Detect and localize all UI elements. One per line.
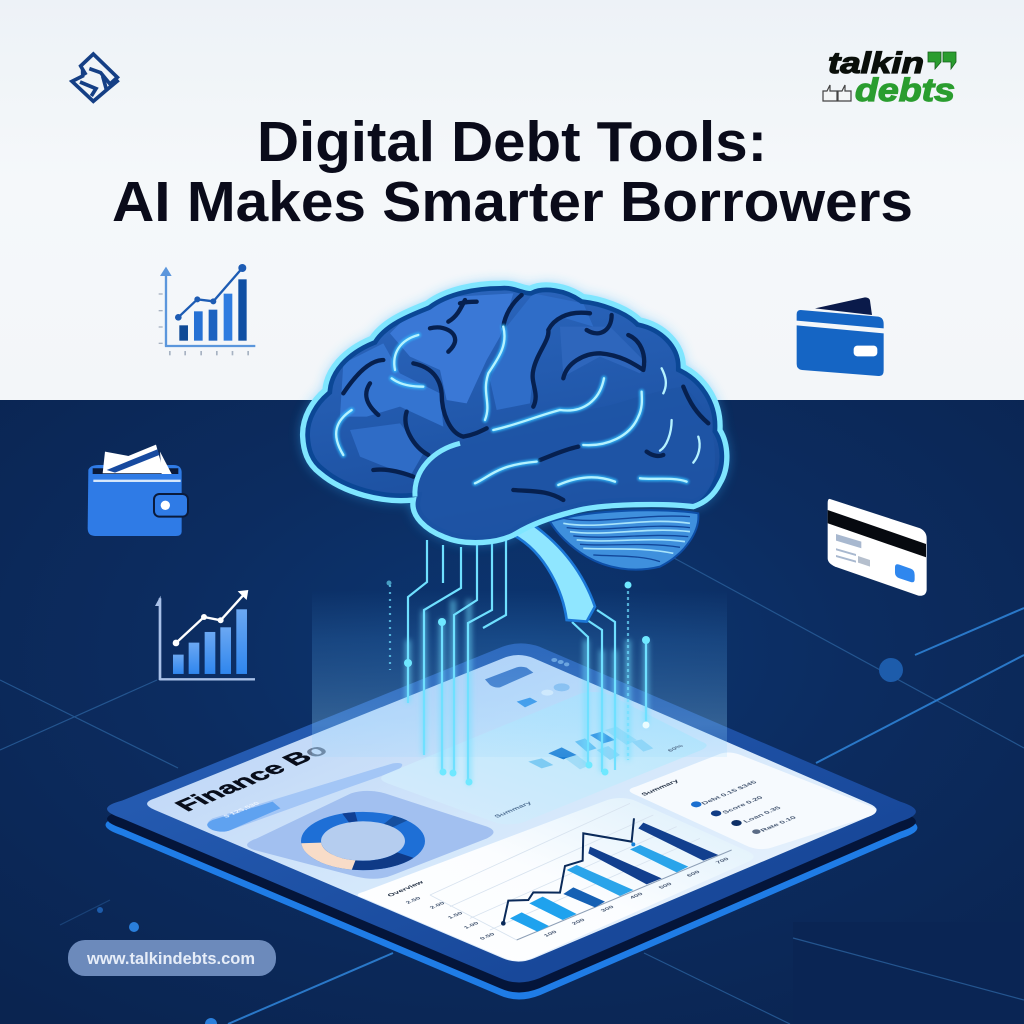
cerebellum (550, 510, 698, 570)
brain body (303, 283, 727, 543)
dashboard small labels: 100 (543, 930, 559, 938)
dashboard small labels: Debt 0.15 $345 (699, 779, 759, 806)
logo word: talkin: talkin (828, 47, 924, 80)
brain outer glow (303, 283, 727, 543)
dashboard small labels: 400 (629, 892, 645, 900)
chart card (358, 798, 754, 961)
dashboard small labels: 200 (571, 918, 587, 926)
chart baseline (517, 850, 732, 940)
icon: outlined quote bubbles (823, 85, 851, 101)
chart bars (510, 823, 718, 932)
dashboard small labels: Summary (492, 800, 533, 819)
logo word: debts: debts (855, 72, 955, 108)
dashboard small labels: 600 (686, 870, 702, 878)
dashboard small labels: Rate 0.10 (758, 815, 798, 833)
chart grid (430, 803, 700, 940)
website url: www.talkindebts.com (86, 950, 255, 968)
brain dark folds (343, 295, 708, 500)
dashboard small labels: 0.50 (479, 932, 497, 941)
dashboard small labels: 2.00 (429, 901, 447, 910)
top centre card (381, 692, 707, 824)
chart trend line (503, 818, 634, 923)
brain lighter folds (340, 293, 647, 477)
tablet dark side (107, 653, 916, 992)
circuit nodes (386, 580, 650, 786)
icon: green quote bubbles (928, 52, 956, 69)
dashboard small labels: Overview (385, 879, 426, 898)
brain stem (513, 525, 595, 622)
top centre bar chart (528, 727, 653, 769)
icon: growth chart on light background (159, 264, 255, 355)
logo: talkin debts (823, 47, 956, 108)
donut panel (247, 791, 494, 879)
glow beam over tablet (312, 590, 727, 757)
website pill (68, 940, 276, 976)
dashboard small labels: $ 125,530 (221, 801, 261, 819)
legend bullets (691, 801, 761, 834)
brain outline (303, 283, 727, 543)
donut chart (311, 817, 415, 865)
lobe outline (415, 443, 460, 497)
dashboard small labels: 1.50 (447, 911, 465, 920)
glowing fold lines (336, 327, 700, 485)
icon: bank card on dark background (828, 499, 927, 596)
top window dots (551, 658, 569, 666)
bar chart on dashboard (430, 803, 732, 940)
dashboard heading: Finance Bo (168, 740, 335, 815)
logo: left diamond mark (72, 54, 119, 101)
tablet dashboard (107, 643, 916, 998)
dashboard small labels: Score 0.20 (720, 795, 765, 815)
top small buttons (517, 683, 570, 707)
dashboard small labels: Summary (639, 778, 680, 797)
dashboard small labels (221, 744, 798, 941)
dashboard small labels: 60% (667, 744, 685, 753)
brain (303, 283, 727, 622)
icon: blue wallet with notes (88, 445, 188, 536)
dashboard small labels: Loan 0.35 (741, 805, 783, 824)
icon: credit card wallet on light background (797, 297, 884, 376)
brain inner dark rim (305, 286, 724, 503)
title line 1: Digital Debt Tools: (257, 110, 767, 174)
dashboard small labels: 2.50 (405, 896, 423, 905)
lower lobe fill (415, 387, 715, 540)
dashboard small labels: 500 (658, 882, 674, 890)
dashboard small labels: 300 (600, 905, 616, 913)
circuit lines above dashboard (390, 540, 646, 785)
tablet blue underglow edge (107, 659, 916, 998)
tablet frame (107, 643, 916, 982)
icon: growth chart on dark background (155, 590, 255, 680)
tablet top details (485, 658, 653, 769)
tablet screen (147, 655, 877, 962)
finance badge (207, 763, 402, 832)
glowing fold halo (336, 327, 687, 485)
title line 2: AI Makes Smarter Borrowers (112, 170, 913, 234)
title (112, 110, 913, 234)
dashboard small labels: 1.00 (463, 921, 481, 930)
legend card (630, 752, 876, 849)
dashboard small labels: 700 (715, 857, 731, 865)
top dark buttons (485, 667, 533, 688)
